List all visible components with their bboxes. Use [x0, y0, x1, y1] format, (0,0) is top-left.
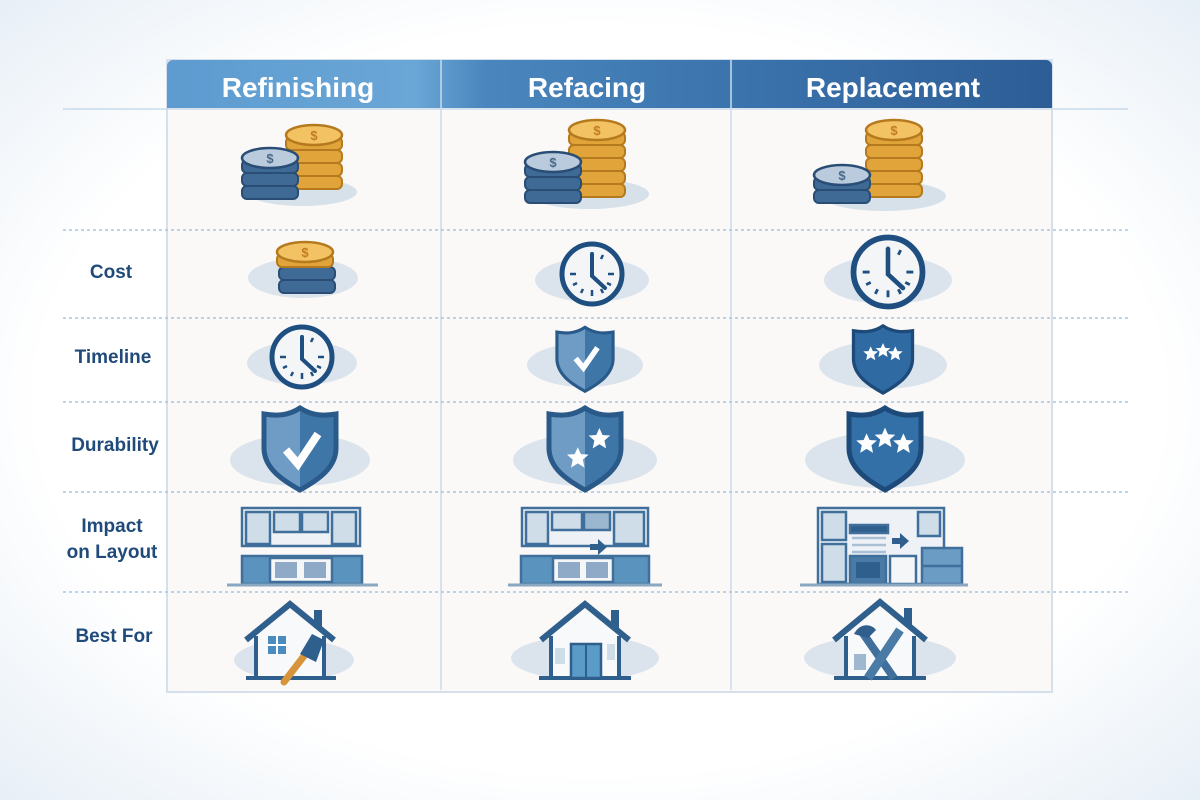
row labels: [67, 262, 159, 647]
icon: coins refinishing: [242, 125, 357, 206]
header: Refinishing: Refinishing: [222, 72, 374, 103]
icon: house paintbrush: [234, 604, 354, 682]
icon: kitchen refacing: [508, 508, 662, 585]
icon: timeline clock refinishing: [247, 327, 357, 387]
icon: cost clock refacing: [535, 244, 649, 304]
icon: house door: [511, 604, 659, 680]
icon: durability shield two stars: [513, 408, 657, 490]
icon: coins refacing: [525, 120, 649, 209]
table panel: [63, 60, 1128, 692]
header bar: [167, 60, 1052, 108]
label: Impact on Layout: Impact: [81, 516, 143, 537]
icon: timeline shield check: [527, 327, 643, 391]
icon: kitchen refinishing: [227, 508, 378, 585]
icon: cost small coins: [248, 242, 358, 298]
label: Durability: Durability: [71, 435, 159, 456]
icon: durability shield check: [230, 408, 370, 490]
label: Cost: Cost: [90, 262, 133, 283]
icon: durability shield three stars: [805, 408, 965, 490]
icon: kitchen replacement: [800, 508, 968, 585]
label: Best For: Best For: [75, 626, 153, 647]
label: Timeline: Timeline: [75, 347, 151, 368]
header: Refacing: Refacing: [528, 72, 646, 103]
label: Impact on Layout: on Layout: [67, 542, 158, 563]
icon: cost clock replacement: [824, 238, 952, 306]
icon: coins replacement: [814, 120, 946, 211]
icon: house tools: [804, 602, 956, 680]
icon: timeline shield stars: [819, 326, 947, 393]
header: Replacement: Replacement: [806, 72, 980, 103]
